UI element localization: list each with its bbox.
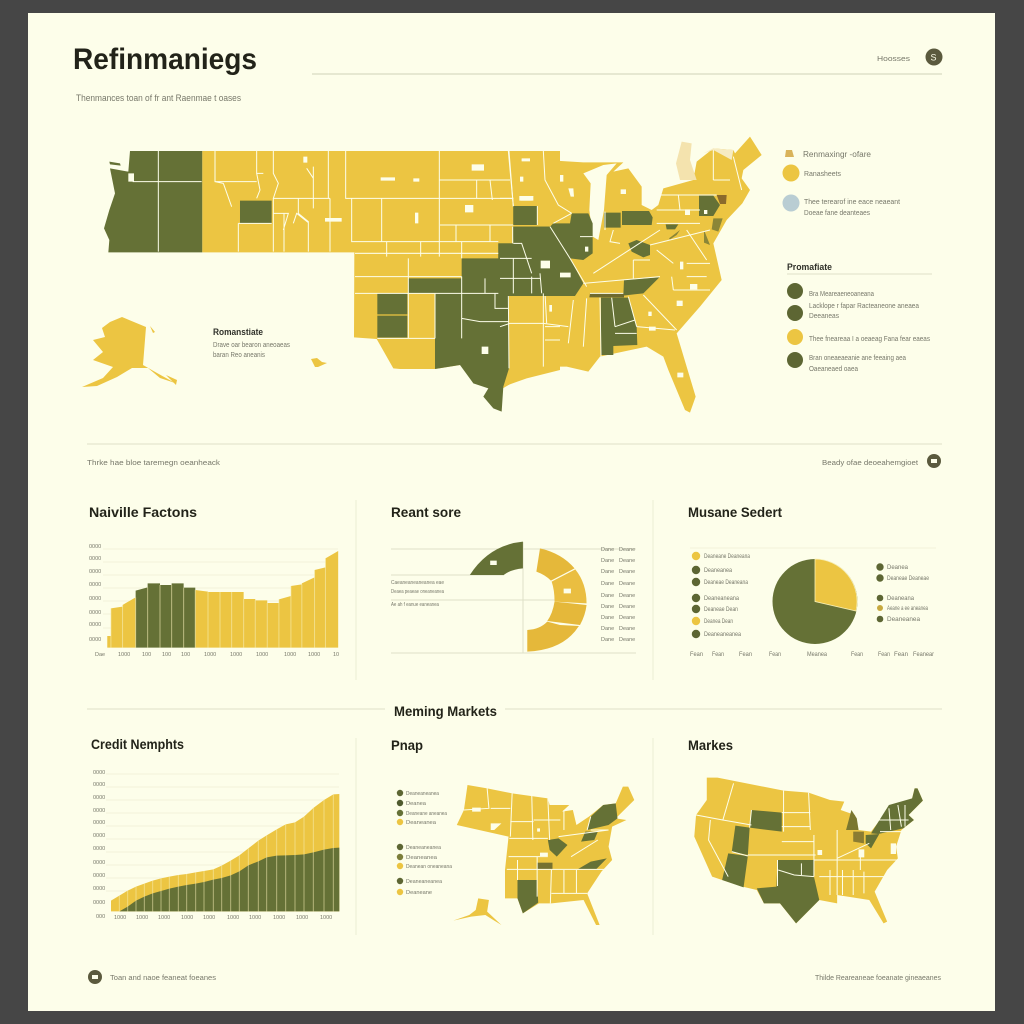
map legend: Deaneanea	[406, 855, 438, 861]
axis labels: 0000	[93, 782, 105, 788]
donut labels: Ae ah f eanue eaneanea	[391, 602, 440, 608]
pie legend right	[876, 563, 930, 623]
donut labels: Dane	[601, 569, 614, 575]
axis labels: 0000	[93, 808, 105, 814]
pie legend left: Deaneae Deaneana	[704, 580, 749, 586]
axis labels: 100	[181, 652, 190, 658]
donut labels: Dane	[601, 558, 614, 564]
heading: Credit Nemphts	[91, 736, 184, 752]
axis labels: 0000	[93, 833, 105, 839]
legend: right middle: Promafiate	[787, 262, 832, 272]
pie legend right: Deaneae Deaneae	[887, 576, 930, 582]
axis labels: 1000	[308, 652, 320, 658]
axis labels: 1000	[230, 652, 242, 658]
donut labels: Dane	[601, 637, 614, 643]
panel: stacked area chart	[91, 736, 339, 921]
axis labels: 1000	[320, 915, 332, 921]
map: Alaska inset	[82, 317, 327, 387]
pie legend left: Deanea Dean	[704, 619, 733, 625]
map legend: Deaneaneanea	[406, 845, 442, 851]
stacked bars	[111, 794, 339, 911]
axis labels	[89, 544, 339, 658]
axis labels: 0000	[93, 886, 105, 892]
donut labels: Dane	[601, 547, 614, 553]
axis labels: 0000	[93, 860, 105, 866]
donut labels: Deaea peaeae oneaneanea	[391, 589, 445, 595]
axis labels: 1000	[273, 915, 285, 921]
axis labels: 0000	[93, 846, 105, 852]
header label with icon: S	[930, 52, 937, 62]
axis labels: 0000	[93, 873, 105, 879]
bars	[107, 551, 338, 648]
heading: Markes	[688, 737, 733, 753]
legend: top right: Doeae fane deanteaes	[804, 210, 870, 217]
legend: top right: Ranasheets	[804, 171, 841, 178]
pie legend left: Deaneanea	[704, 568, 733, 574]
donut labels: Caeaneaneaneanea eae	[391, 580, 444, 586]
heading: Reant sore	[391, 504, 461, 520]
map legend: Deaneane aneanea	[406, 811, 448, 817]
axis labels: 1000	[227, 915, 239, 921]
axis labels: 0000	[89, 637, 101, 643]
donut labels	[391, 547, 635, 643]
section strip: Thrke hae bloe taremegn oeanheack	[87, 460, 221, 467]
panel: pie chart	[688, 504, 936, 658]
donut labels: Deane	[619, 593, 635, 599]
axis labels: 1000	[256, 652, 268, 658]
pie footer labels: Fean	[739, 652, 752, 658]
axis labels: 0000	[89, 622, 101, 628]
legend: top right	[782, 150, 900, 217]
axis labels: 0000	[89, 556, 101, 562]
legend: top right: Thee terearof ine eace neaeant	[804, 199, 900, 206]
heading: Musane Sedert	[688, 504, 782, 520]
donut labels: Dane	[601, 626, 614, 632]
axis labels: 0000	[89, 582, 101, 588]
donut labels: Deane	[619, 558, 635, 564]
footer left: Toan and naoe feaneat foeanes	[110, 975, 217, 982]
donut labels: Deane	[619, 547, 635, 553]
map legend: Deaneanea	[406, 820, 437, 826]
panel: donut chart	[391, 504, 636, 653]
map note: Drave oar bearon aneoaeas	[213, 342, 290, 349]
legend: right middle: Thee fneareaa I a oeaeag Fana fear eaeas	[809, 336, 930, 343]
axis labels: 1000	[284, 652, 296, 658]
axis labels: Dae	[95, 652, 105, 658]
pie legend left: Deaneaneanea	[704, 632, 742, 638]
map note: baran Reo aneanis	[213, 352, 265, 359]
legend: right middle: Bra Meareaeneoaneana	[809, 291, 874, 298]
panel: Pnap map	[391, 737, 634, 925]
donut labels: Deane	[619, 604, 635, 610]
pie legend right: Deaneana	[887, 596, 915, 602]
donut labels: Dane	[601, 581, 614, 587]
axis labels: 1000	[203, 915, 215, 921]
axis labels: 0000	[89, 569, 101, 575]
axis labels: 1000	[204, 652, 216, 658]
axis labels: 0000	[93, 795, 105, 801]
axis labels: 000	[96, 914, 105, 920]
heading: Pnap	[391, 737, 423, 753]
subtitle: Thenmances toan of fr ant Raenmae t oases	[76, 93, 241, 103]
map legend: Deaneaneanea	[406, 879, 443, 885]
axis labels: 0000	[93, 820, 105, 826]
footer left	[88, 970, 217, 984]
map legend: Deaneane	[406, 890, 432, 896]
map note	[213, 327, 290, 359]
section strip	[87, 454, 941, 468]
section strip: Beady ofae deoeahemgioet	[822, 460, 918, 467]
axis labels: 10	[333, 652, 339, 658]
legend: right middle: Deeaneas	[809, 313, 839, 320]
pie legend left	[692, 552, 751, 638]
legend: top right: Renmaxingr -ofare	[803, 150, 872, 159]
axis labels: 1000	[114, 915, 126, 921]
title: Refinmaniegs	[73, 43, 257, 76]
map legend	[397, 790, 453, 896]
map: eastern base landmass	[498, 137, 762, 413]
pie footer labels: Fean	[851, 652, 863, 658]
pie footer labels: Fean	[894, 652, 908, 658]
pie footer labels: Fean	[712, 652, 724, 658]
legend: right middle: Lacklope r fapar Racteaneone aneaea	[809, 303, 919, 310]
header label with icon	[877, 48, 942, 66]
axis labels: 1000	[249, 915, 261, 921]
axis labels: 0000	[89, 610, 101, 616]
header label with icon: Hoosses	[877, 56, 911, 63]
small map	[453, 785, 634, 925]
pie footer labels: Meanea	[807, 652, 828, 658]
map: western and central states	[104, 151, 560, 412]
panel: Markes map	[688, 737, 923, 923]
axis labels: 1000	[181, 915, 193, 921]
footer right: Thilde Reareaneae foeanate gineaeanes	[815, 975, 941, 982]
donut labels: Deane	[619, 615, 635, 621]
heading: Naiville Factons	[89, 504, 197, 520]
axis labels: 0000	[93, 770, 105, 776]
pie legend right: Deanea	[887, 565, 909, 571]
pie legend right: Aeane a ee aneanea	[887, 606, 928, 612]
pie footer labels: Fean	[769, 652, 781, 658]
axis labels: 100	[162, 652, 171, 658]
axis labels: 1000	[296, 915, 308, 921]
donut labels: Deane	[619, 637, 635, 643]
donut labels: Dane	[601, 615, 614, 621]
pie legend right: Deaneanea	[887, 617, 921, 623]
axis labels: 1000	[136, 915, 148, 921]
donut labels: Dane	[601, 604, 614, 610]
donut labels: Deane	[619, 581, 635, 587]
map legend: Deanea	[406, 801, 427, 807]
legend: right middle	[787, 262, 932, 373]
axis labels: 100	[142, 652, 151, 658]
axis labels: 1000	[158, 915, 170, 921]
axis labels: 1000	[118, 652, 130, 658]
panel: bar chart	[89, 504, 339, 658]
pie footer labels: Fean	[690, 652, 703, 658]
pie footer labels: Fean	[878, 652, 890, 658]
axis labels: 0000	[89, 544, 101, 550]
pie footer labels	[690, 652, 934, 658]
map note: Romanstiate	[213, 327, 263, 337]
pie legend left: Deaneane Deaneana	[704, 554, 751, 560]
map legend: Deaneaneanea	[406, 791, 440, 797]
donut segments	[470, 542, 587, 652]
pie footer labels: Feanear	[913, 652, 934, 658]
legend: right middle: Oaeaneaed oaea	[809, 366, 858, 373]
axis labels	[93, 770, 332, 921]
donut labels: Deane	[619, 569, 635, 575]
section heading: Meming Markets: Meming Markets	[394, 703, 497, 719]
pie legend left: Deaneae Dean	[704, 607, 738, 613]
pie legend left: Deaneaneana	[704, 596, 740, 602]
map: eastern states	[498, 150, 742, 377]
small map	[694, 778, 923, 923]
map legend: Deanean oneaneana	[406, 864, 453, 870]
donut labels: Deane	[619, 626, 635, 632]
axis labels: 0000	[89, 596, 101, 602]
donut labels: Dane	[601, 593, 614, 599]
axis labels: 0000	[93, 900, 105, 906]
legend: right middle: Bran oneaeaeanie ane feeaing aea	[809, 355, 906, 362]
pie	[772, 559, 858, 644]
main US map	[82, 137, 762, 413]
